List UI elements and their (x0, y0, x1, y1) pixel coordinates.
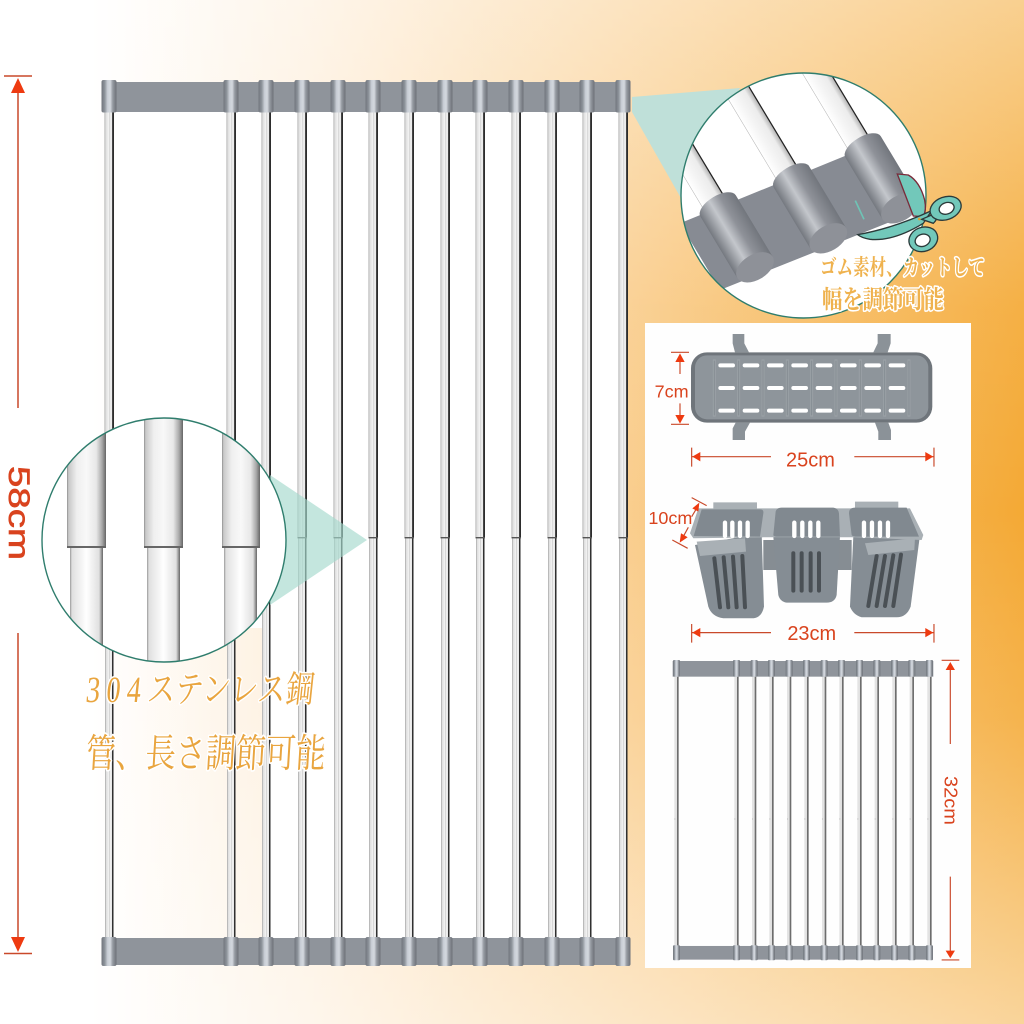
dimension: 58cm height: 58cm (2, 466, 35, 560)
dimension: 10cm and 23cm (648, 498, 934, 645)
label: stainless tube, adjustable length (84, 671, 327, 776)
dimension: 32cm: 32cm (940, 776, 961, 825)
dimension: 10cm and 23cm: 23cm (787, 623, 836, 645)
icon: sponge tray (691, 334, 932, 440)
callout circle: tube joint detail (42, 410, 286, 667)
main rack: extended 58cm (102, 80, 630, 966)
rod and cylinder 1 (683, 144, 772, 282)
rod and cylinder 2 (728, 86, 846, 254)
bottom rubber bar (102, 937, 630, 966)
dimension: 7cm: 25cm (786, 450, 835, 472)
icon: three-part utensil basket (690, 502, 923, 618)
top rubber bar (102, 80, 630, 112)
tray drawing with dimensions (655, 334, 934, 472)
dimension: 7cm (655, 352, 934, 472)
steel rods (104, 112, 628, 938)
icon: scissors (858, 174, 965, 256)
label: stainless tube, adjustable length: 304ステンレス鋼 (84, 671, 316, 711)
callout circle: rubber bar detail (680, 72, 927, 319)
callout pointer: tube joint (270, 475, 367, 605)
label: cut rubber to adjust width (820, 256, 985, 314)
rod and cylinder 3 (802, 74, 912, 224)
panel: accessories and folded size (645, 323, 971, 968)
dimension: 10cm and 23cm: 10cm (648, 508, 692, 528)
folded rack with 32cm dimension (673, 660, 961, 960)
dimension: 7cm: 7cm (655, 381, 689, 401)
rubber strip (684, 156, 888, 288)
label: cut rubber to adjust width: 幅を調節可能 (822, 286, 944, 314)
callout pointer: rubber bar (632, 88, 740, 200)
dimension: 58cm height (2, 76, 35, 954)
basket drawing with dimensions (648, 498, 934, 645)
dimension: 32cm (940, 660, 961, 960)
panel: white rack interior (115, 112, 627, 938)
label: stainless tube, adjustable length: 管、長さ調節可能 (84, 732, 327, 776)
mini rack (673, 660, 933, 960)
label: cut rubber to adjust width: ゴム素材、カットして (820, 256, 985, 281)
